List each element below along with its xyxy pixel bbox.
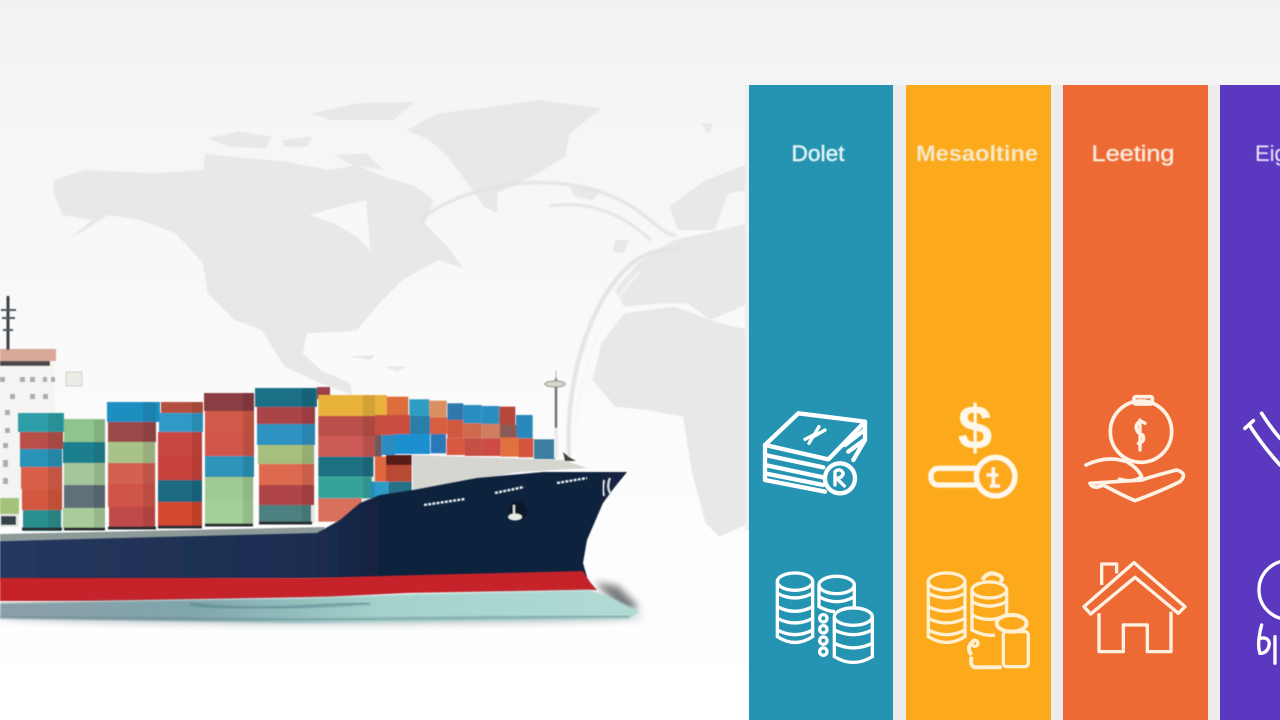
heading: Leeting: Leeting <box>1092 141 1174 166</box>
map: Arctic islands <box>208 102 416 170</box>
heading: Mesaoltine: Mesaoltine <box>916 141 1038 166</box>
map: Scandinavia <box>669 163 750 230</box>
map: Africa <box>592 307 750 537</box>
stack 2 <box>63 419 105 529</box>
hull <box>0 472 627 580</box>
stack 6 <box>255 387 330 523</box>
map: North America <box>54 153 463 395</box>
forecastle deck <box>412 455 587 490</box>
icon: house <box>1084 563 1185 652</box>
map: Hudson Bay <box>309 200 371 252</box>
deck edge <box>0 527 325 541</box>
sea water <box>0 590 640 623</box>
stack 4 <box>158 402 203 528</box>
container stacks <box>18 387 555 531</box>
panel: Leeting <box>1063 85 1208 720</box>
radar mast <box>545 370 576 461</box>
bow wave shadow <box>595 582 640 612</box>
panel: Mesaoltine <box>906 85 1051 720</box>
icon: coin over open hand <box>1086 397 1183 501</box>
ship superstructure <box>0 296 82 527</box>
panel: Dolet <box>749 85 893 720</box>
heading: Dolet: Dolet <box>792 141 844 166</box>
hull markings <box>424 478 587 505</box>
icon: dollar sign and magnifier <box>931 394 1015 496</box>
icon: partial crossed tools <box>1245 413 1280 465</box>
world map <box>54 100 750 537</box>
stack 7 and forward bays <box>318 395 555 522</box>
stack 1 <box>18 413 64 531</box>
shipping route arcs <box>420 183 680 455</box>
icon: dollar sign and magnifier: $ <box>958 394 992 463</box>
container stack shading <box>48 388 375 531</box>
map: Iceland, Britain and small islands <box>348 123 713 372</box>
water wake shadow <box>0 610 645 624</box>
icon: coin stacks <box>777 573 872 662</box>
anchor <box>508 502 527 520</box>
column gaps <box>745 85 749 530</box>
panel: Eig <box>1220 85 1280 720</box>
bow emblem <box>603 478 611 496</box>
icon: coins and jars <box>928 573 1028 667</box>
map: Greenland <box>407 100 601 213</box>
stack 5 <box>204 393 254 524</box>
icon: banknote stack with coin <box>765 413 865 493</box>
container ship <box>0 296 645 624</box>
container base shadows <box>22 523 312 529</box>
icon: partial coin and symbol <box>1259 561 1280 663</box>
map: Europe <box>615 223 750 320</box>
stack 3 <box>107 402 160 529</box>
red waterline band <box>0 571 597 601</box>
